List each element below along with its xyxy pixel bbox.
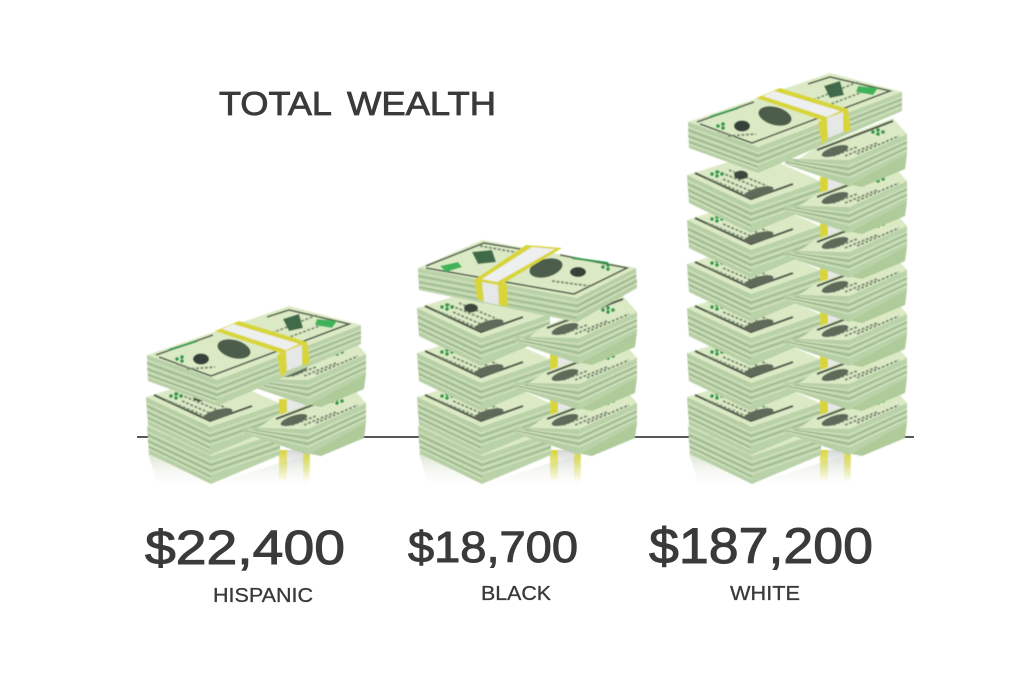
title: [219, 85, 496, 122]
label: Black: BLACK: [481, 583, 552, 605]
money stack: Black: [417, 240, 637, 490]
money stack: White: [687, 73, 907, 490]
money stack: Hispanic: [146, 306, 366, 490]
baseline axis: [137, 436, 914, 438]
label: White: WHITE: [730, 583, 800, 605]
label: Hispanic: HISPANIC: [213, 585, 313, 607]
title: TOTAL: [219, 85, 332, 122]
value: Hispanic: $22,400: [145, 522, 345, 575]
value: White: $187,200: [649, 518, 873, 574]
value: Black: $18,700: [408, 523, 578, 572]
title: WEALTH: [347, 85, 496, 122]
